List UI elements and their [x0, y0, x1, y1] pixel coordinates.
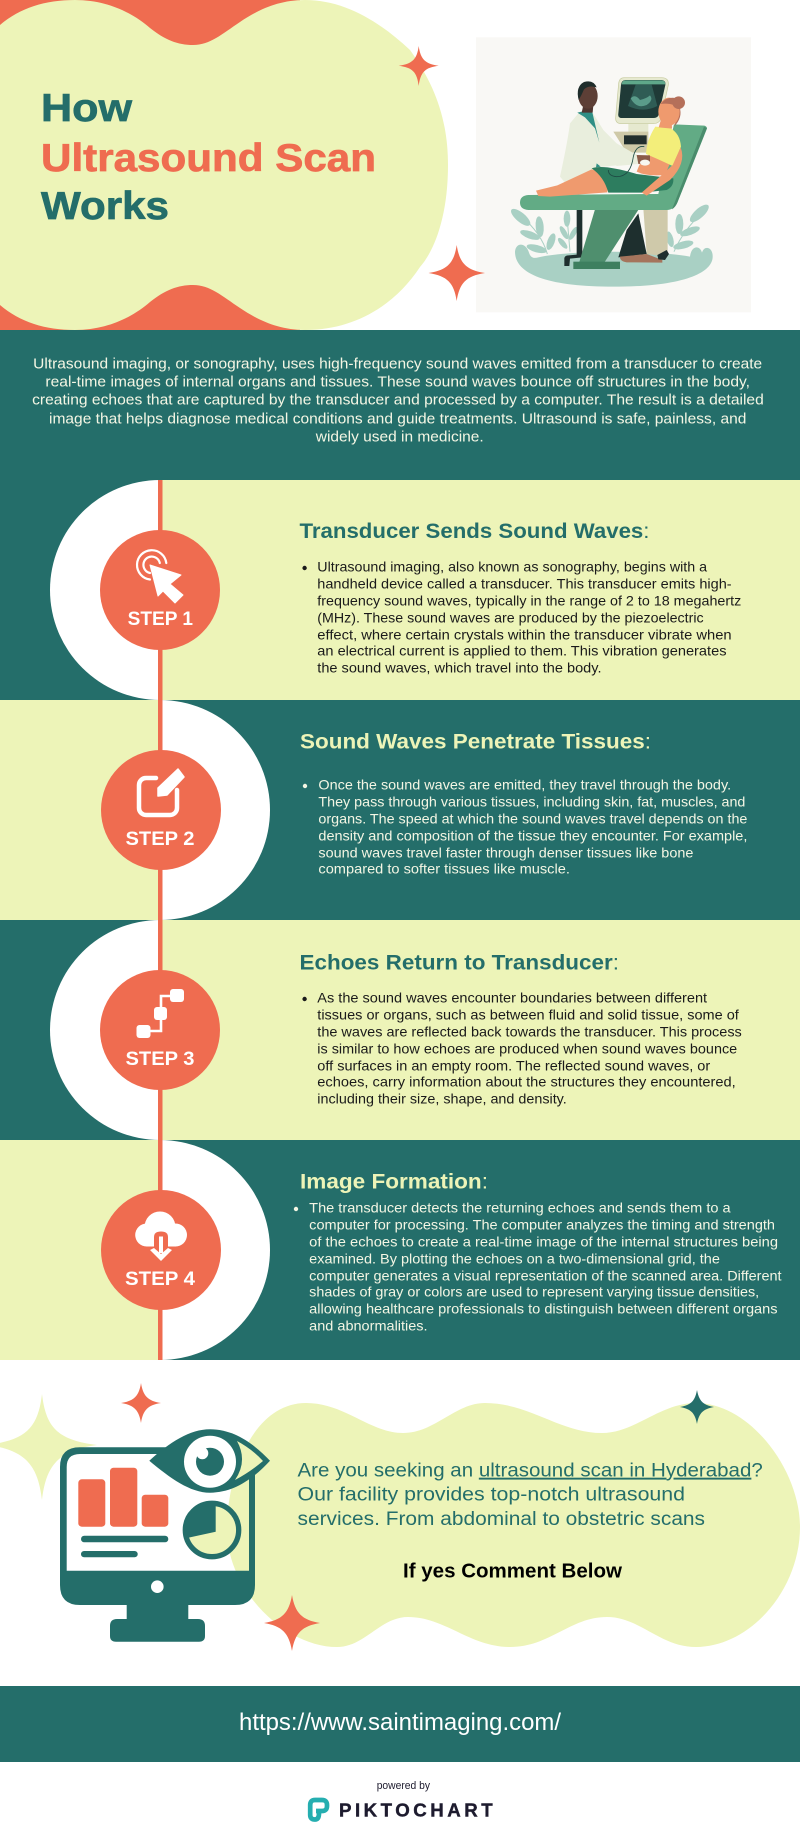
eye [149, 1429, 270, 1493]
step 3 text: is similar to how echoes are produced when sound waves bounce [317, 1041, 737, 1057]
title: How [41, 87, 133, 130]
panel: call to action [0, 1383, 800, 1651]
step 1 text: (MHz). These sound waves are produced by the piezoelectric [317, 610, 704, 626]
cream blob [227, 1403, 800, 1647]
call to action text [298, 1461, 763, 1530]
icon: cloud download [135, 1212, 187, 1261]
step 4 badge [101, 1190, 221, 1310]
step 4 badge: STEP 4 [125, 1269, 195, 1290]
probe and arm [607, 154, 638, 166]
intro text: image that helps diagnose medical conditions and guide treatments. Ultrasound is safe, painless, and [49, 410, 746, 427]
step 1 badge: STEP 1 [128, 609, 193, 630]
step 2 badge: STEP 2 [126, 829, 194, 850]
step 1 badge [100, 530, 220, 650]
panel: step 1 [0, 480, 800, 700]
step 1 text: frequency sound waves, typically in the range of 2 to 18 megahertz [317, 593, 741, 609]
cream blob [0, 0, 448, 330]
large cream star [0, 1394, 97, 1500]
step 3 badge: STEP 3 [126, 1049, 194, 1070]
intro text: Ultrasound imaging, or sonography, uses high-frequency sound waves emitted from a transducer to create [33, 355, 762, 372]
footer: powered by: powered by [377, 1780, 430, 1792]
star: header bottom [428, 245, 485, 301]
step 4 text: allowing healthcare professionals to distinguish between different organs [309, 1301, 778, 1317]
panel: header [0, 0, 448, 330]
title: Works [41, 185, 169, 228]
step 2 text: Sound Waves Penetrate Tissues : [300, 730, 651, 753]
panel: website band [0, 1686, 800, 1762]
patient [536, 169, 608, 197]
title: Ultrasound Scan [41, 137, 376, 180]
monitor icon [60, 1429, 270, 1642]
step 3 text: Echoes Return to Transducer : [300, 951, 619, 974]
step 4 text [294, 1170, 782, 1334]
step 1 text: effect, where certain crystals within the transducer vibrate when [317, 627, 732, 643]
prompt: If yes Comment Below [403, 1561, 622, 1583]
step 2 text: density and composition of the tissue they encounter. For example, [318, 828, 747, 844]
step 4 text: of the echoes to create a real-time image of the internal structures being [309, 1234, 778, 1250]
star: header top [399, 46, 439, 86]
step 3 text: off surfaces in an empty room. The reflected sound waves, or [317, 1058, 711, 1074]
intro text: creating echoes that are captured by the transducer and processed by a computer. The result is a detailed [32, 392, 764, 409]
step 1 text: handheld device called a transducer. This transducer emits high- [317, 576, 732, 592]
panel: step 3 [0, 920, 800, 1140]
doctor legs [643, 208, 668, 257]
call to action text: Are you seeking an ultrasound scan in Hyderabad ? [298, 1461, 763, 1482]
call to action text: services. From abdominal to obstetric scans [298, 1509, 705, 1530]
intro text: widely used in medicine. [315, 429, 484, 446]
step 3 text: As the sound waves encounter boundaries between different [317, 990, 707, 1006]
step 4 text: computer for processing. The computer analyzes the timing and strength [309, 1217, 775, 1233]
step 3 badge [100, 970, 220, 1090]
panel: step 4 [0, 1140, 800, 1360]
footer: powered by: PIKTOCHART [339, 1800, 493, 1821]
intro text: real-time images of internal organs and tissues. These sound waves bounce off structures in the body, [45, 374, 750, 391]
bars [78, 1479, 105, 1527]
step 2 badge [101, 750, 221, 870]
step 4 text: Image Formation : [300, 1170, 488, 1193]
doctor coat [560, 113, 637, 183]
icon: connected nodes [136, 989, 184, 1038]
step 4 text: shades of gray or colors are used to represent varying tissue densities, [309, 1284, 759, 1300]
pie [185, 1503, 239, 1557]
illustration: ultrasound exam [476, 37, 751, 312]
step 3 text: tissues or organs, such as between fluid and solid tissue, some of [317, 1007, 739, 1023]
step 1 text: Transducer Sends Sound Waves : [300, 520, 650, 543]
step 3 text [300, 951, 742, 1107]
lines [81, 1536, 168, 1542]
step 4 text: computer generates a visual representation of the scanned area. Different [309, 1268, 782, 1284]
icon: edit [139, 769, 184, 815]
timeline line [158, 480, 162, 1360]
panel: website band: https://www.saintimaging.com/ [239, 1709, 561, 1736]
chair [564, 209, 582, 266]
step 1 text [300, 520, 741, 676]
title [41, 87, 376, 228]
step 2 text: Once the sound waves are emitted, they travel through the body. [318, 777, 731, 793]
step 3 text: the waves are reflected back towards the transducer. This process [317, 1024, 742, 1040]
step 2 text [300, 730, 748, 877]
doctor head [582, 105, 593, 113]
step 1 text: Ultrasound imaging, also known as sonography, begins with a [317, 559, 707, 575]
intro text [32, 355, 764, 446]
step 2 text: They pass through various tissues, including skin, fat, muscles, and [318, 794, 745, 810]
step 4 text: and abnormalities. [309, 1318, 428, 1334]
orange corner waves [0, 0, 300, 330]
step 2 text: organs. The speed at which the sound waves travel depends on the [318, 811, 748, 827]
icon: piktochart logo [310, 1800, 327, 1820]
star: small orange [121, 1383, 161, 1423]
ground mound [515, 245, 713, 287]
monitor [613, 78, 668, 153]
step 3 text: including their size, shape, and density. [317, 1091, 567, 1107]
icon: cursor click [137, 550, 183, 603]
step 1 text: the sound waves, which travel into the body. [317, 660, 602, 676]
panel: intro [0, 330, 800, 480]
star: orange lower [264, 1595, 320, 1651]
step 4 text: examined. By plotting the echoes on a two-dimensional grid, the [309, 1251, 720, 1267]
step 3 text: echoes, carry information about the structures they encountered, [317, 1074, 736, 1090]
step 2 text: compared to softer tissues like muscle. [318, 861, 570, 877]
step 2 text: sound waves travel faster through denser tissues like bone [318, 845, 694, 861]
step 4 text: The transducer detects the returning echoes and sends them to a [309, 1200, 731, 1216]
step 1 text: an electrical current is applied to them. This vibration generates [317, 643, 726, 659]
star: teal [680, 1390, 714, 1424]
panel: step 2 [0, 700, 800, 920]
call to action text: Our facility provides top-notch ultrasound [298, 1485, 685, 1506]
leaves [508, 202, 711, 255]
footer: powered by [310, 1780, 493, 1821]
